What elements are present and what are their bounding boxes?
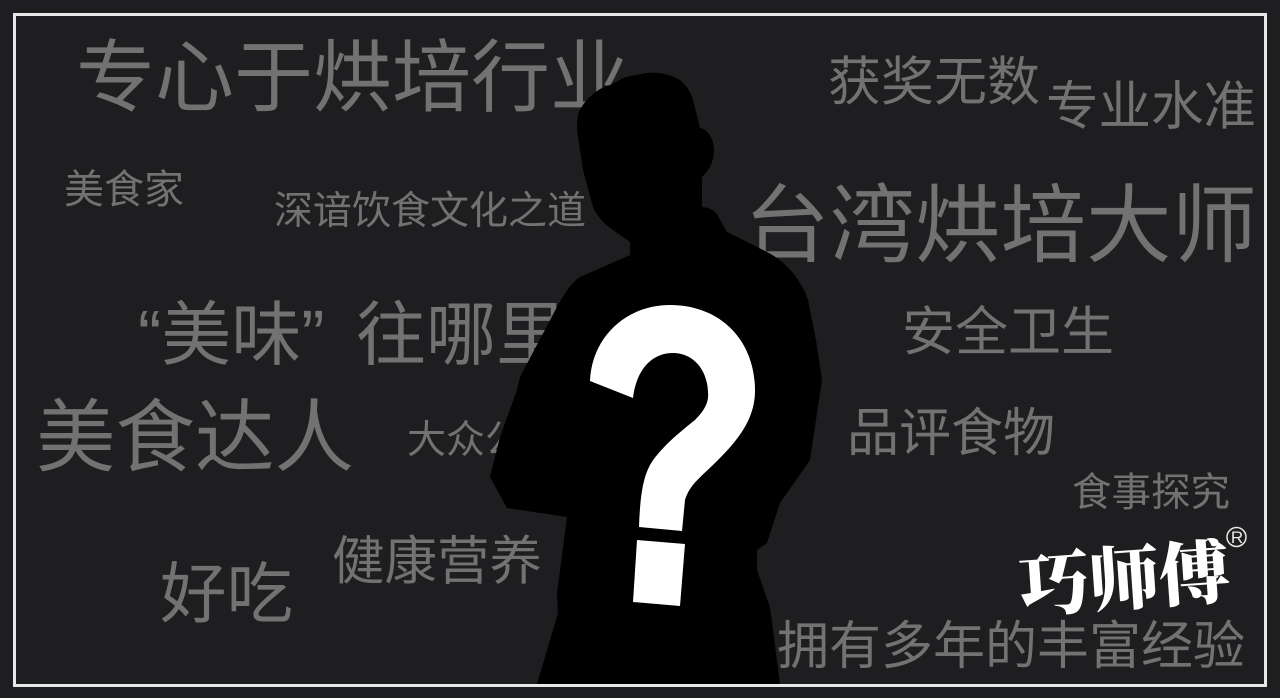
keyword: 好吃: 好吃	[160, 558, 293, 632]
logo wordmark: 巧师傅	[1017, 534, 1232, 627]
keyword: 拥有多年的丰富经验: 拥有多年的丰富经验	[777, 618, 1245, 676]
keyword: “美味”: “美味”	[138, 296, 325, 374]
keyword: 食事探究: 食事探究	[1072, 471, 1230, 515]
keyword: 获奖无数: 获奖无数	[828, 53, 1040, 112]
keyword: 往哪里走: 往哪里走	[356, 296, 636, 374]
keyword: 安全卫生: 安全卫生	[902, 303, 1114, 362]
question mark dot	[633, 540, 685, 606]
keyword: 健康营养: 健康营养	[332, 532, 542, 591]
silhouette of a person	[490, 73, 822, 684]
keyword: 大众公认: 大众公认	[407, 419, 563, 462]
registered ring	[1227, 528, 1246, 546]
question mark stem	[590, 305, 755, 531]
brand logo: 巧师傅	[1017, 528, 1246, 627]
keyword: 美食家: 美食家	[64, 168, 184, 212]
keyword: 台湾烘培大师: 台湾烘培大师	[744, 179, 1257, 274]
keyword: 专心于烘培行业: 专心于烘培行业	[76, 33, 629, 122]
keyword: 美食达人: 美食达人	[36, 393, 354, 482]
keyword: 品评食物: 品评食物	[847, 405, 1055, 463]
keyword: 深谙饮食文化之道: 深谙饮食文化之道	[274, 190, 586, 233]
keyword: 专业水准: 专业水准	[1046, 77, 1256, 136]
registered mark: R	[1231, 528, 1243, 547]
